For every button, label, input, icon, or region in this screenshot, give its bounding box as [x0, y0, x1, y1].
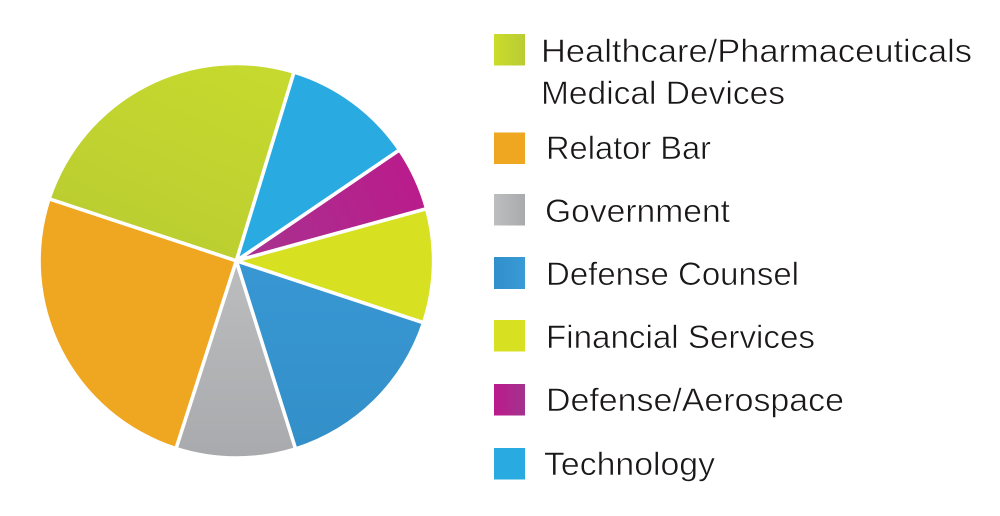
pie chart [41, 65, 432, 456]
legend item: financial services: Financial Services [546, 319, 815, 355]
legend item: government: Government [545, 193, 730, 229]
slice: defense aerospace [236, 151, 425, 261]
slice: defense counsel [236, 261, 422, 447]
legend item: healthcare: Healthcare/Pharmaceuticals [541, 33, 972, 69]
legend item: defense aerospace: Defense/Aerospace [546, 382, 844, 418]
legend item: technology: Technology [544, 446, 715, 482]
legend item: healthcare [494, 33, 972, 111]
slice: government [176, 261, 295, 456]
slice: technology [236, 74, 398, 261]
legend item: relator bar: Relator Bar [546, 130, 711, 166]
legend [494, 33, 972, 482]
legend item: healthcare: Medical Devices [541, 75, 785, 111]
slice: healthcare [51, 65, 294, 261]
slice: relator bar [41, 199, 236, 447]
legend item: defense counsel: Defense Counsel [546, 256, 799, 292]
slice: financial services [236, 209, 432, 322]
